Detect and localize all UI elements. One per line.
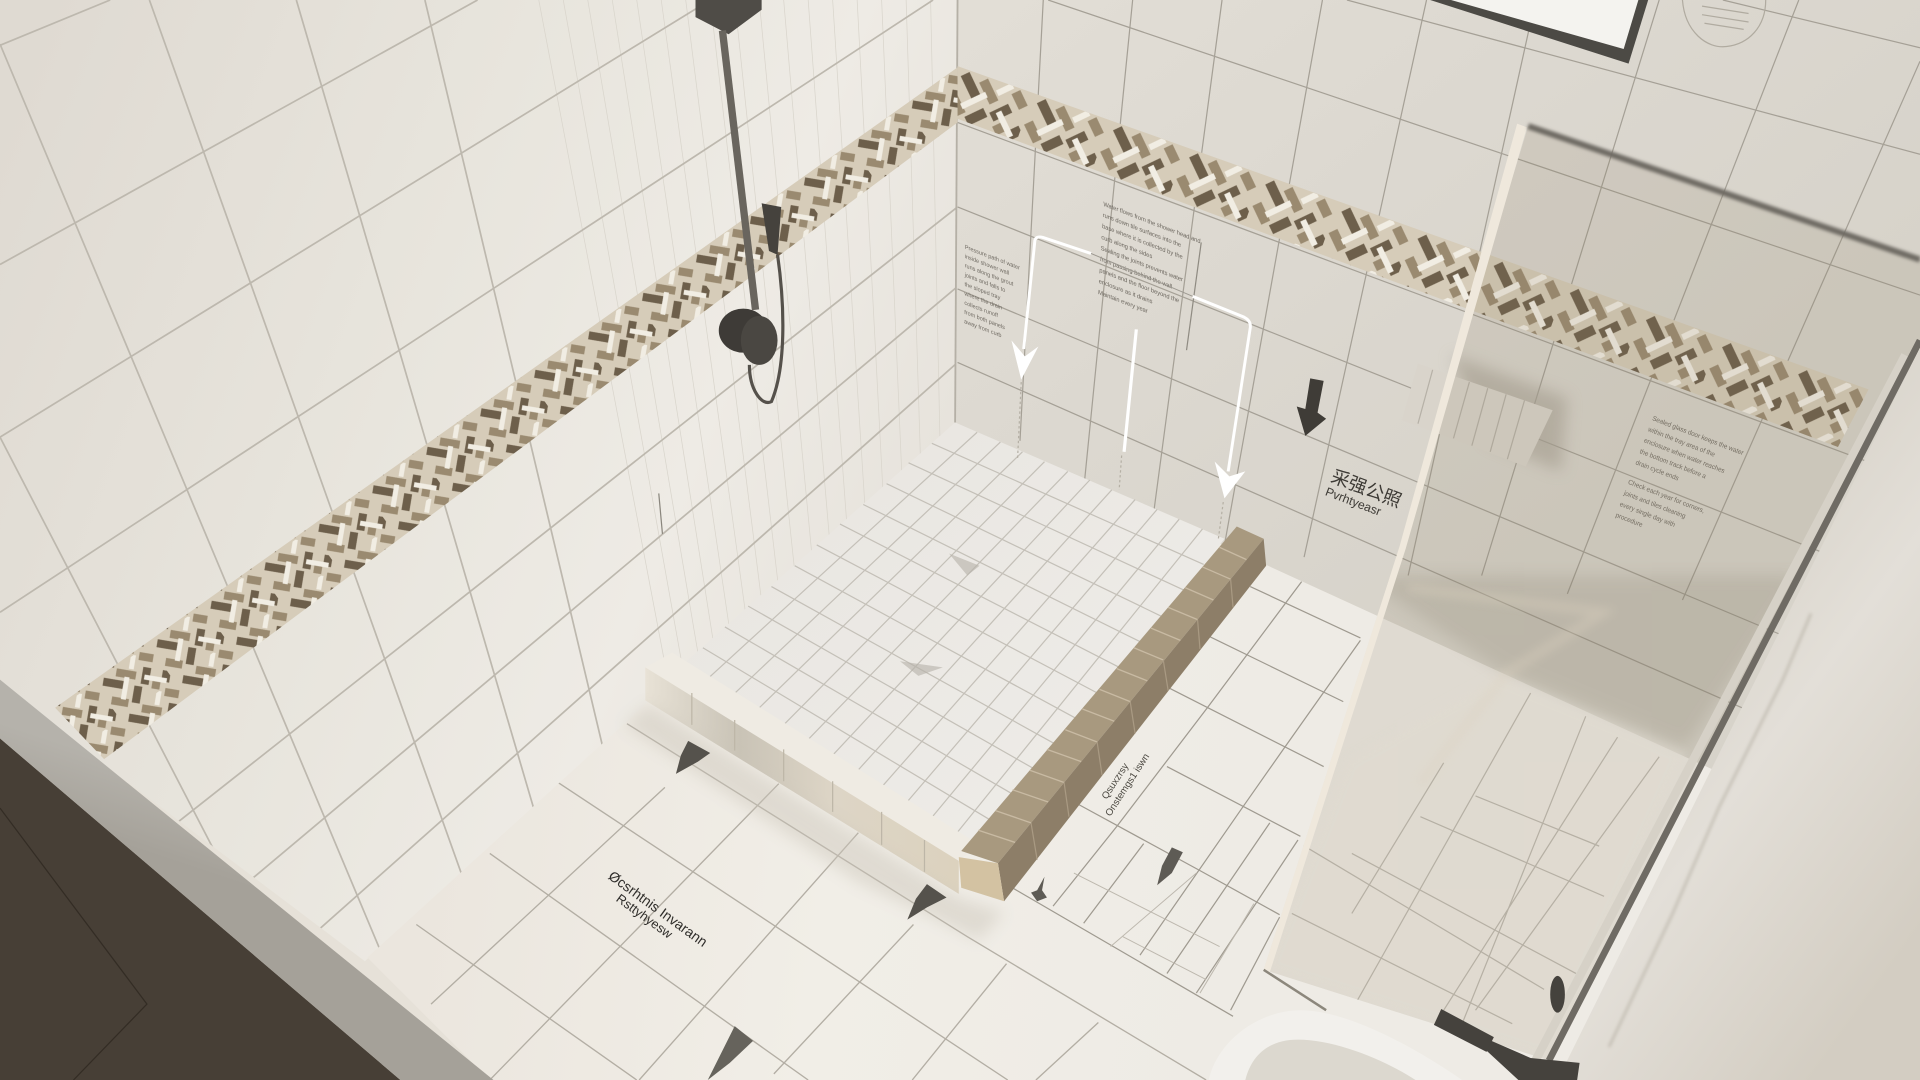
foreground ledge [0, 680, 493, 1080]
wall label: 采强公照 [1328, 465, 1404, 511]
decorative mosaic band: right wall [958, 66, 1869, 447]
wall label: Pvrhtyeasr [1323, 485, 1383, 519]
white flow arrow: right [1193, 296, 1250, 498]
soap dish [1402, 355, 1567, 471]
annotation text block: centre: panels and the floor beyond the [1099, 267, 1180, 305]
annotation text block: centre: base where it is collected by the [1102, 223, 1183, 261]
shower rail fixture [696, 0, 783, 402]
annotation text block: right: within the tray area of the [1646, 426, 1716, 459]
vertical guide line [1187, 242, 1201, 350]
annotation text block: right: joints and tiles cleaning [1622, 490, 1687, 520]
floor label: Rsttyhyesw [614, 891, 676, 942]
annotation text block: centre: enclosure as it drains [1099, 278, 1153, 306]
annotation text block: left: runs along the grout [965, 263, 1014, 288]
annotation text block: left: the sloped tray [965, 282, 1000, 302]
curb label: Qsuxzrsy [1100, 761, 1131, 802]
shower pan with mosaic tiles [680, 422, 1224, 851]
water drips [1018, 382, 1223, 539]
floor direction marker 3 [708, 1026, 753, 1080]
annotation text block: right: Check each year for corners, [1627, 479, 1706, 515]
annotation text block: right: the bottom track before a [1639, 448, 1707, 481]
annotation text block: centre: from passing behind the wall [1100, 256, 1172, 291]
annotation text block: left: inside shower wall [965, 254, 1009, 277]
annotation text block: centre: Sealing the joints prevents water [1101, 245, 1183, 284]
floor direction marker 5 [1031, 877, 1047, 901]
annotation text block: centre: Maintain every year [1098, 289, 1148, 315]
wall corner line [955, 0, 958, 422]
white flow line: centre [1124, 329, 1136, 452]
annotation text block: left: collects runoff [964, 300, 998, 320]
shower curb: brown stone [959, 527, 1266, 901]
annotation text block: centre: curb along the sides [1101, 234, 1152, 260]
annotation text block: right [1613, 415, 1745, 554]
floor direction marker 2 [907, 884, 947, 920]
floor direction marker 1 [676, 741, 710, 774]
sink [1209, 1010, 1462, 1080]
annotation text block: right: every single day with [1619, 501, 1676, 529]
door hinge hardware [1434, 976, 1580, 1080]
annotation text block: right: Sealed glass door keeps the water [1651, 415, 1745, 457]
wall badge icon [1682, 0, 1766, 47]
annotation text block: left: joints and falls to [964, 272, 1006, 294]
white flow arrow: left [1011, 237, 1091, 380]
connecting guide line [1091, 253, 1193, 296]
annotation text block: left: away from curb [964, 319, 1002, 340]
annotation text block: centre [1098, 201, 1201, 333]
window [1430, 0, 1648, 64]
curb shadow [624, 704, 1004, 940]
annotation text block: right: enclosure when water reaches [1643, 437, 1726, 475]
annotation text block: left [963, 244, 1020, 346]
glass shower door [1264, 124, 1920, 1060]
annotation text block: left: Pressure path of water [965, 245, 1020, 272]
annotation text block: right: drain cycle ends [1634, 459, 1680, 483]
shower curb: white side [645, 653, 980, 894]
decorative mosaic band: left wall [55, 67, 958, 759]
annotation text block: centre: runs down tile surfaces into the [1102, 212, 1182, 249]
floor label: Øcsrhtnis Invarann [606, 867, 711, 950]
annotation text block: centre: Water flows from the shower head and [1103, 201, 1201, 245]
floor direction marker 4 [1157, 847, 1183, 885]
annotation text block: left: from both panels [964, 310, 1005, 331]
floor [378, 544, 1712, 1080]
left wall [0, 0, 956, 961]
curb label: Onstemgs1 iswn [1104, 752, 1152, 818]
dark arrow [1297, 378, 1326, 436]
right wall [956, 0, 1920, 768]
door frame [1536, 340, 1920, 1060]
annotation text block: right: procedure [1614, 512, 1644, 529]
annotation text block: left: where the drain [963, 291, 1002, 312]
right foreground wall [1558, 348, 1920, 1080]
